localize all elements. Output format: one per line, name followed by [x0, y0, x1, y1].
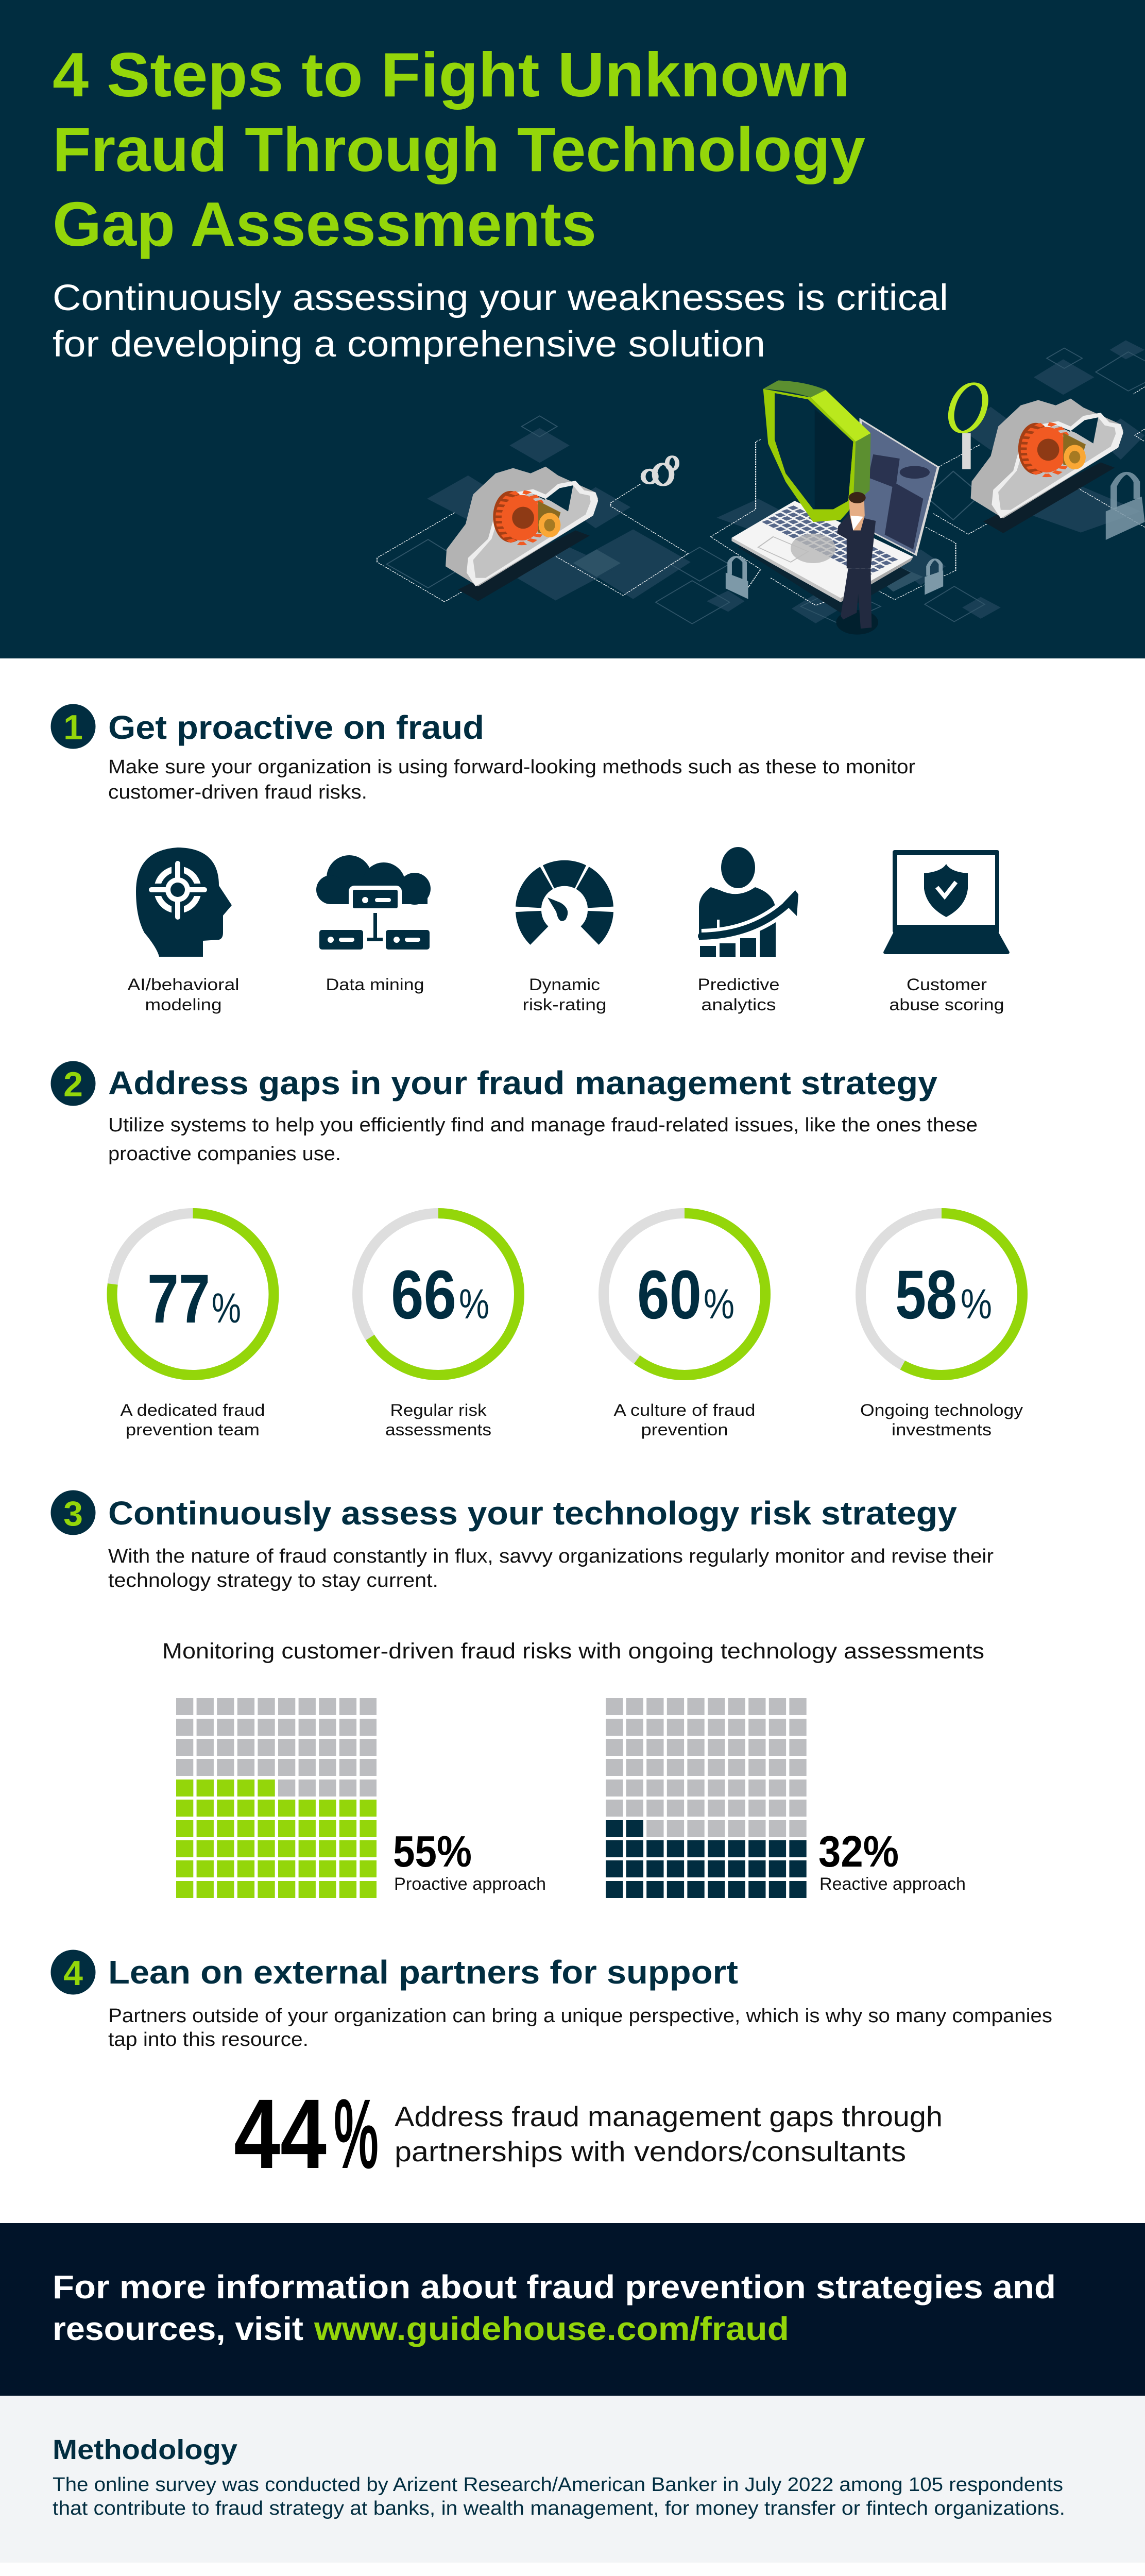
donut: 58 percent: % — [961, 1281, 992, 1328]
label: customer abuse scoring: abuse scoring — [889, 995, 1004, 1014]
methodology text: The online survey was conducted by Arizent Research/American Banker in July 2022 among 105 respondents — [53, 2474, 1063, 2496]
icon: magnifier — [946, 383, 990, 469]
section 4 — [50, 1950, 1052, 2189]
stat: 44 percent: 44 — [234, 2078, 327, 2189]
icon: gauge — [528, 873, 601, 936]
badge 3 — [50, 1490, 96, 1535]
chart title: Monitoring customer-driven fraud risks with ongoing technology assessments — [162, 1639, 984, 1664]
call to action text: resources, visit — [53, 2310, 303, 2347]
badge 3: 3 — [63, 1494, 83, 1533]
waffle chart: reactive 32 percent — [606, 1706, 807, 1890]
badge 1 — [50, 704, 96, 749]
donut: 77 percent: 77 — [147, 1261, 210, 1337]
stat: 55 percent proactive: 55% — [393, 1827, 472, 1876]
icon: laptop shield — [883, 850, 1010, 954]
label: risk assessments: Regular risk — [390, 1401, 487, 1419]
panel: methodology — [0, 2396, 1145, 2563]
subtitle: for developing a comprehensive solution — [53, 324, 765, 365]
title: Fraud Through Technology — [53, 114, 865, 184]
icon: right cloud with gears — [971, 399, 1123, 533]
icon: laptop — [731, 419, 938, 613]
icon: predictive analytics — [699, 847, 798, 957]
label: AI/behavioral modeling: modeling — [145, 995, 221, 1014]
donut: 58 percent: 58 — [895, 1257, 957, 1333]
text block 4: Partners outside of your organization can bring a unique perspective, which is why so many companies — [108, 2005, 1052, 2027]
panel: header — [0, 0, 1145, 658]
heading 4: Lean on external partners for support — [108, 1954, 738, 1991]
footer — [0, 2563, 1145, 2576]
stat: 55 percent proactive: Proactive approach — [394, 1874, 546, 1894]
section 1 — [50, 704, 1010, 1014]
text block 4 — [108, 2005, 1052, 2050]
donut: 60 percent: % — [704, 1281, 734, 1328]
label: risk assessments: assessments — [385, 1420, 491, 1439]
methodology text — [53, 2474, 1065, 2519]
call to action text: For more information about fraud prevention strategies and — [53, 2268, 1056, 2306]
donut: 77 percent: % — [212, 1285, 241, 1332]
donut: 58 percent — [861, 1213, 1022, 1375]
text block 1: Make sure your organization is using forward-looking methods such as these to monitor — [108, 756, 915, 778]
donut: 66 percent: % — [459, 1281, 489, 1328]
badge 2: 2 — [63, 1065, 83, 1104]
label: predictive analytics — [697, 975, 780, 1014]
icon: padlocks — [726, 473, 1145, 599]
label: dynamic risk-rating: risk-rating — [522, 995, 607, 1014]
badge 4: 4 — [63, 1954, 83, 1993]
heading 2: Address gaps in your fraud management strategy — [108, 1064, 937, 1101]
stat description: Address fraud management gaps through — [395, 2100, 943, 2132]
label: predictive analytics: Predictive — [697, 975, 780, 994]
icon: small gears — [643, 456, 677, 485]
label: AI/behavioral modeling: AI/behavioral — [128, 975, 239, 994]
label: dedicated team: A dedicated fraud — [121, 1401, 265, 1419]
section 3 — [50, 1490, 994, 1894]
label: dynamic risk-rating: Dynamic — [529, 975, 600, 994]
heading 3: Continuously assess your technology risk strategy — [108, 1495, 957, 1532]
stat description: partnerships with vendors/consultants — [395, 2136, 906, 2167]
title: 4 Steps to Fight Unknown — [53, 40, 850, 110]
stat: 55 percent proactive — [393, 1827, 546, 1894]
icon: left cloud with gears — [446, 467, 598, 601]
stat description — [395, 2100, 943, 2167]
badge 1: 1 — [63, 708, 83, 747]
text block 3: technology strategy to stay current. — [108, 1570, 438, 1591]
stat: 32 percent reactive: Reactive approach — [819, 1874, 966, 1894]
stat: 32 percent reactive — [818, 1827, 966, 1894]
icon: AI head — [136, 848, 232, 957]
heading 1: Get proactive on fraud — [108, 709, 484, 746]
label: dedicated team: prevention team — [126, 1420, 260, 1439]
icon: shield — [763, 380, 870, 522]
label: predictive analytics: analytics — [702, 995, 776, 1014]
donut: 66 percent — [357, 1213, 519, 1375]
subtitle: Continuously assessing your weaknesses is critical — [53, 278, 948, 318]
label: risk assessments — [385, 1401, 491, 1439]
label: customer abuse scoring — [889, 975, 1004, 1014]
text block 3: With the nature of fraud constantly in flux, savvy organizations regularly monitor and revise their — [108, 1546, 994, 1567]
icon: businessman — [836, 492, 878, 635]
icon: data mining — [316, 855, 431, 950]
stat: 44 percent: % — [334, 2078, 379, 2189]
label: data mining: Data mining — [326, 975, 424, 994]
text block 1 — [108, 756, 915, 803]
label: culture: A culture of fraud — [614, 1401, 755, 1419]
methodology text: that contribute to fraud strategy at banks, in wealth management, for money transfer or fintech organizations. — [53, 2498, 1065, 2519]
label: AI/behavioral modeling — [128, 975, 239, 1014]
label: culture — [614, 1401, 755, 1439]
section 2 — [50, 1061, 1023, 1439]
label: investments — [860, 1401, 1023, 1439]
text block 2: proactive companies use. — [108, 1143, 341, 1165]
illustration: cloud security — [377, 340, 1145, 635]
text block 3 — [108, 1546, 994, 1591]
label: dynamic risk-rating — [522, 975, 607, 1014]
title: Gap Assessments — [53, 189, 596, 259]
call to action text: www.guidehouse.com/fraud — [314, 2310, 789, 2347]
badge 2 — [50, 1061, 96, 1106]
label: dedicated team — [121, 1401, 265, 1439]
badge 4 — [50, 1950, 96, 1995]
call to action text — [53, 2268, 1056, 2347]
text block 4: tap into this resource. — [108, 2029, 309, 2050]
donut: 60 percent — [604, 1213, 765, 1375]
donut: 77 percent — [112, 1213, 274, 1375]
panel: call to action — [0, 2223, 1145, 2396]
label: investments: investments — [892, 1420, 992, 1439]
label: customer abuse scoring: Customer — [907, 975, 987, 994]
methodology heading: Methodology — [53, 2434, 237, 2465]
subtitle — [53, 278, 948, 365]
label: culture: prevention — [641, 1420, 728, 1439]
donut: 60 percent: 60 — [637, 1257, 702, 1333]
text block 2 — [108, 1114, 978, 1165]
donut: 66 percent: 66 — [391, 1257, 456, 1333]
title — [53, 40, 865, 259]
text block 1: customer-driven fraud risks. — [108, 782, 367, 803]
stat: 32 percent reactive: 32% — [818, 1827, 899, 1876]
text block 2: Utilize systems to help you efficiently find and manage fraud-related issues, like the ones these — [108, 1114, 978, 1136]
label: investments: Ongoing technology — [860, 1401, 1023, 1419]
waffle chart: proactive 55 percent — [176, 1706, 377, 1890]
